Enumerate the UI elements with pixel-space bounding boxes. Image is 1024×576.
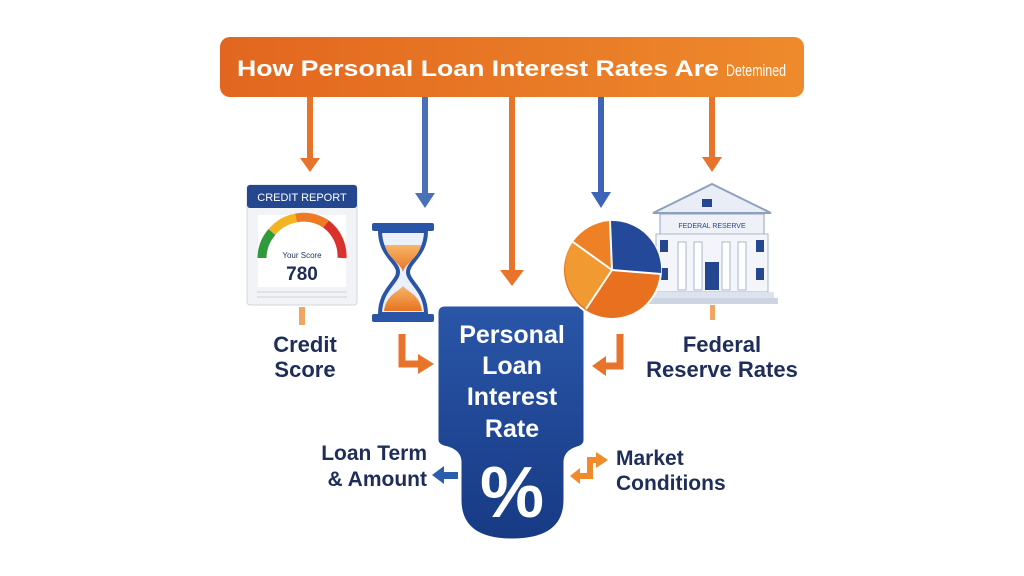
center shield: Interest: [467, 383, 558, 411]
label: federal reserve rates: [646, 332, 798, 382]
arrow: to pie: [591, 97, 611, 208]
label: credit score: Credit: [273, 332, 337, 357]
arrow: market conditions: [570, 452, 608, 484]
title bar: [220, 37, 804, 97]
center shield: %: [480, 453, 544, 533]
label: market conditions: [616, 447, 726, 495]
arrow: to bank: [702, 97, 722, 172]
icon: credit report: 780: [286, 264, 318, 285]
label: federal reserve rates: Reserve Rates: [646, 357, 798, 382]
title bar: How Personal Loan Interest Rates Are: [237, 56, 719, 81]
arrow: loan term: [432, 466, 458, 484]
arrow: to hourglass: [415, 97, 435, 208]
center shield: Personal: [459, 321, 565, 349]
arrow: to center: [500, 97, 524, 286]
label: loan term & amount: & Amount: [327, 468, 427, 491]
icon: pie chart: [563, 221, 661, 319]
arrow: pie elbow: [592, 334, 620, 376]
center shield: [437, 305, 585, 540]
icon: hourglass: [372, 223, 434, 322]
center shield: Loan: [482, 352, 542, 380]
label: market conditions: Conditions: [616, 472, 726, 495]
label: loan term & amount: Loan Term: [321, 442, 427, 465]
icon: credit report: CREDIT REPORT: [257, 192, 347, 204]
arrow: to credit score: [300, 97, 320, 172]
center shield: Rate: [485, 415, 539, 443]
icon: federal reserve building: FEDERAL RESERVE: [678, 223, 746, 230]
arrow: hourglass elbow: [402, 334, 434, 374]
icon: federal reserve building: [646, 184, 778, 320]
icon: credit report: [247, 185, 357, 325]
label: loan term & amount: [321, 442, 427, 491]
label: credit score: [273, 332, 337, 382]
title bar: Detemined: [726, 61, 786, 80]
label: credit score: Score: [274, 357, 336, 382]
label: federal reserve rates: Federal: [683, 332, 761, 357]
icon: credit report: Your Score: [282, 251, 322, 260]
label: market conditions: Market: [616, 447, 684, 470]
